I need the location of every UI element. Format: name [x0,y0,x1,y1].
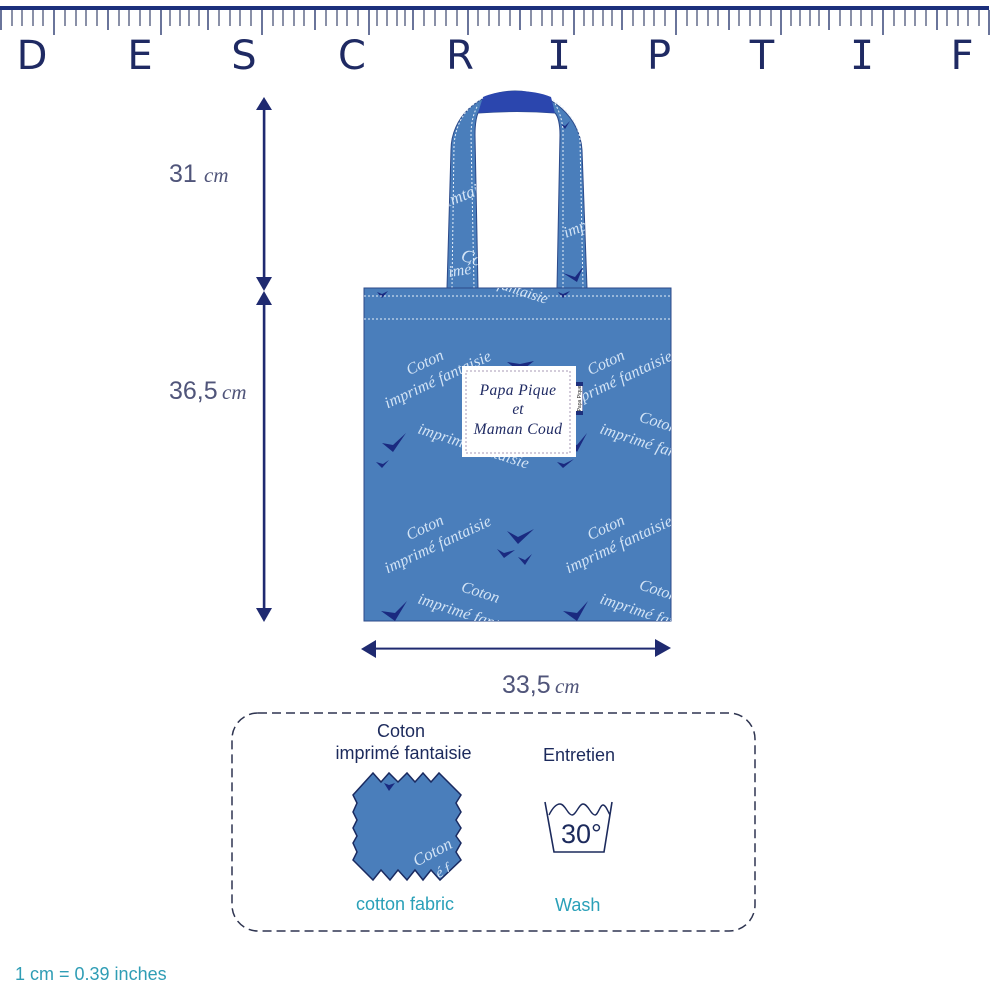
fabric translation: cotton fabric [356,894,454,914]
title: R [446,33,474,79]
fabric pattern: Coton [404,512,446,544]
bag handles: imtaisie [442,173,500,211]
fabric pattern: Coton [637,409,680,437]
title: F [950,33,974,79]
title: I [547,33,571,79]
icon: wash 30 degrees [545,802,612,852]
fabric pattern: imprimé fantaisie [563,348,675,412]
handle height label: 31 [169,160,197,188]
side tag: Papa Pique [577,385,583,411]
sewn label: Papa Pique [479,382,556,399]
title: P [647,33,671,79]
bag height label [169,377,246,405]
arrow: bag height [256,291,272,622]
bag height label: 36,5 [169,377,218,405]
sewn label: Maman Coud [473,421,562,438]
bag height label: cm [222,380,246,404]
fabric pattern: imprimé fantaisie [416,591,531,643]
sewn label [462,366,576,457]
fabric pattern: imprimé fantaisie [416,421,531,473]
bag handles [442,91,596,288]
bag handles: imé [447,261,473,281]
bag width label: cm [555,674,580,698]
title: C [338,33,366,79]
bag width label [502,671,580,699]
side tag [576,382,583,415]
fabric swatch [353,773,461,882]
bag handles: impr [561,214,596,242]
fabric swatch: é f [433,860,455,882]
handle height label: cm [204,163,228,187]
arrow: bag width [361,639,671,658]
fabric heading: imprimé fantaisie [335,743,472,763]
handle height label [169,160,228,188]
fabric pattern: Coton [404,347,446,379]
tote bag [364,90,672,622]
fabric pattern: imprimé fantaisie [382,348,494,412]
sewn label: et [512,401,524,418]
fabric heading: Coton [377,721,425,741]
fabric pattern: imprimé fantaisie [598,421,713,473]
title: D [17,33,47,79]
care heading: Entretien [543,745,615,765]
fabric pattern [376,288,671,621]
fabric pattern: Coton [459,579,502,607]
fabric pattern: imprimé fantaisie [563,513,675,577]
fabric pattern: Coton [585,347,627,379]
bag body [364,288,672,622]
title: S [231,33,257,79]
bag handles: Coton [459,245,507,277]
icon: wash 30 degrees: 30° [561,819,602,849]
bag width label: 33,5 [502,671,551,699]
fabric swatch: Coton [410,834,455,870]
unit conversion note: 1 cm = 0.39 inches [15,964,167,984]
fabric pattern: fantaisie [496,277,550,308]
title: T [749,33,775,79]
fabric pattern: imprimé fantaisie [382,513,494,577]
fabric pattern: Coton [585,512,627,544]
panel: materials and care [232,713,755,931]
fabric pattern: Coton [637,577,680,605]
title [17,33,974,79]
title: I [850,33,874,79]
ruler [0,6,989,35]
title: E [127,33,153,79]
care translation: Wash [555,895,600,915]
fabric pattern: imprimé fantaisie [598,591,713,643]
arrow: handle height [256,97,272,291]
